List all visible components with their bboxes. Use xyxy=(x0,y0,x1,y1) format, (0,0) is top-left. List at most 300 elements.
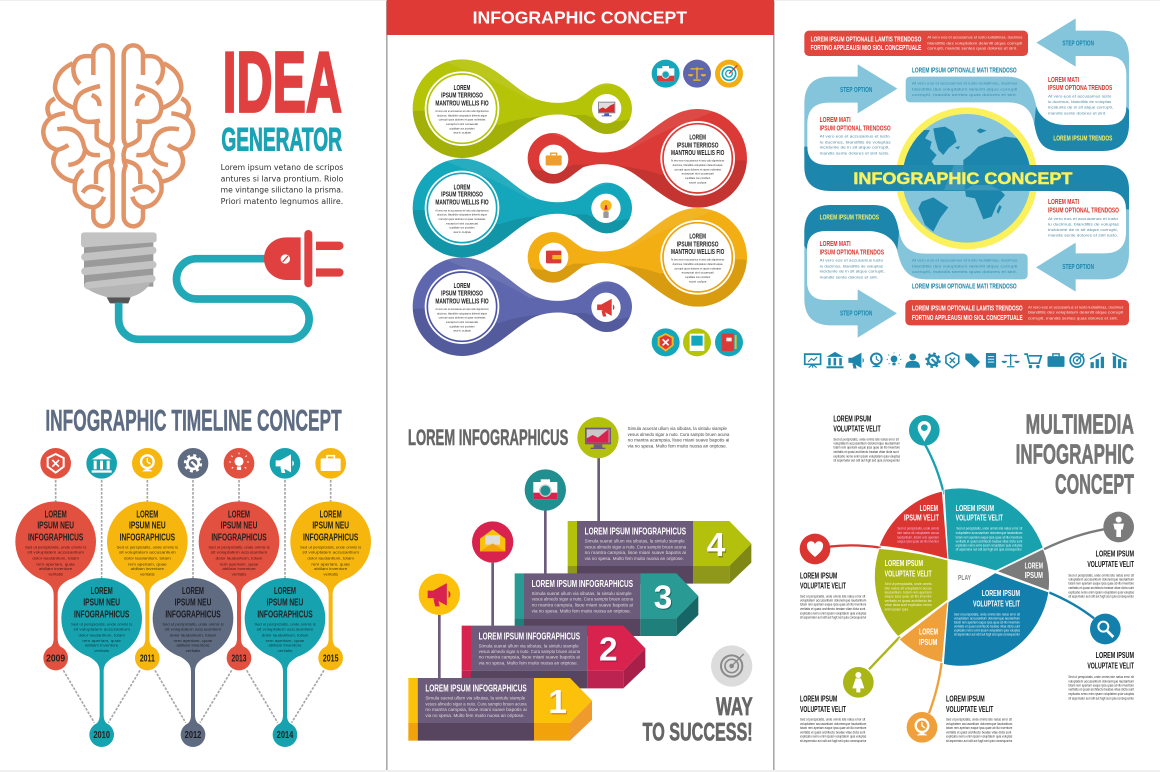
segment text: red: iste natus sit voluptatem accus xyxy=(897,531,939,535)
circle text: red: excepturi sint occaecati xyxy=(682,172,714,176)
arrow ribbon: top right xyxy=(906,18,1129,151)
circle text: orange: excepturi sint occaecati xyxy=(682,271,714,275)
circle text: blue: IPSUM TERRIOSO xyxy=(441,288,483,297)
bubble: 2013: veritatis xyxy=(232,571,246,576)
circle text: red: sunt culpa xyxy=(689,180,707,184)
drop: teal xyxy=(409,156,639,266)
bubble: 2009: Sed ut perspiciatis, unde omnis is xyxy=(25,545,86,550)
text block: left lower: incidunte de in sit atque corrupti, xyxy=(820,270,885,274)
red bar: bottom: blanditiis des voluptatum deleniti atque corrupti xyxy=(1028,311,1124,315)
text block: top: totam rem aperiam eaque ipsa quae ab illo inventore xyxy=(833,446,900,450)
text block: right upper: explicabo nemo enim ipsam voluptatem quia voluptas xyxy=(1068,590,1134,594)
bar: step 4: Simula suerat ullum via sibutas, la sintulu siample xyxy=(585,539,685,544)
text block: right upper: VOLUPTATE VELIT xyxy=(1087,560,1134,569)
bubble: 2011: IPSUM NEU xyxy=(129,521,166,532)
bubble: 2009: 2009 xyxy=(46,653,66,664)
text block: bottom center: veritatis et quasi architecto beatae vitae dicta sunt xyxy=(946,730,1011,734)
segment text: red xyxy=(897,503,940,544)
red bar: top: FORTINO APPLEAUSI MIO SIOL CONCEPTUALE xyxy=(811,43,921,52)
circle text: red: corrupti quos dolores et quas molestias xyxy=(674,167,721,171)
red bar: bottom: corrupti, mandis sentes quas dolores et sint. xyxy=(1028,316,1118,320)
bubble: 2009: IPSUM NEU xyxy=(37,521,74,532)
text block: left upper: IPSUM OPTIONAL TRENDOSO xyxy=(820,125,891,132)
text block: top xyxy=(833,414,901,463)
text block: left upper: At vero eos et accusamus et iusto xyxy=(820,135,890,139)
labels: yellow trendos: LOREM IPSUM TRENDOS xyxy=(1053,134,1112,143)
text block: right upper: veritatis et quasi architecto beatae vitae dicta sunt xyxy=(1068,586,1134,590)
labels: yellow trendos: LOREM IPSUM TRENDOS xyxy=(820,213,879,222)
text block: right upper: voluptatem accusantium doloremque laudantium xyxy=(1068,578,1134,582)
circle text: blue: excepturi sint occaecati xyxy=(446,320,478,324)
red bar: bottom xyxy=(905,300,1129,325)
bubble: 2012: sit voluptatem accusantium xyxy=(165,626,222,631)
icon: target badge xyxy=(715,60,743,88)
box text: top: At vero eos et accusamus et iusto ludiatimas, ducimus xyxy=(912,82,1018,86)
text block: intro xyxy=(221,163,344,206)
panel: steps xyxy=(408,417,753,746)
circle text: teal: MANTROU WELLIS FIO xyxy=(435,198,489,207)
stems xyxy=(439,458,599,679)
panel: world map concept xyxy=(804,18,1129,369)
bubble: 2012: Sed ut perspiciatis, unde omnis is xyxy=(162,621,224,626)
bar: step 1: 1 xyxy=(548,684,567,721)
text block: bottom left: totam rem aperiam eaque ipsa quae ab illo inventore xyxy=(800,726,866,730)
bar: step 1: no mantra campsia, lisoe miani suave bapotis ai xyxy=(425,707,527,712)
circle text: blue: LOREM xyxy=(454,281,470,290)
text block: right lower: LOREM MATI xyxy=(1048,199,1079,206)
text block: right upper: totam rem aperiam eaque ipsa quae ab illo inventore xyxy=(1068,582,1134,586)
icon: bulb badge xyxy=(224,448,254,479)
bubble: 2011: abillam inventore xyxy=(131,566,165,571)
text block: top: voluptatem accusantium doloremque laudantium xyxy=(833,442,900,446)
bubble: 2010: 2010 xyxy=(93,730,110,741)
icon: shield badge xyxy=(652,328,680,356)
text block: top: veritatis et quasi architecto beatae vitae dicta sunt xyxy=(833,450,899,454)
bubble: 2014: INFOGRAPHICUS xyxy=(257,609,313,620)
circle text: orange xyxy=(660,220,735,295)
text block: bottom center: voluptatem accusantium doloremque laudantium xyxy=(946,722,1012,726)
red bar: bottom: FORTINO APPLEAUSI MIO SIOL CONCEPTUALE xyxy=(912,313,1023,322)
text block: intro: Lorem ipsum vetano de scripos xyxy=(221,163,343,172)
text block: left: totam rem aperiam eaque ipsa quae ab illo inventore xyxy=(800,603,866,607)
circle text: green: IPSUM TERRIOSO xyxy=(441,90,483,99)
icon: megaphone badge xyxy=(270,448,300,479)
circle text: red xyxy=(660,121,735,196)
text block: bottom left: VOLUPTATE VELIT xyxy=(800,705,846,714)
circle text: red: MANTROU WELLIS FIO xyxy=(671,148,724,157)
text block: intro: antures si larva prontium. Riolo xyxy=(221,174,344,183)
circle text: green: excepturi sint occaecati xyxy=(446,122,478,126)
cord xyxy=(119,259,309,339)
labels: yellow trendos xyxy=(820,134,1112,222)
segment text: blue: totam rem aperiam eaque ipsa quae ab illo inventore xyxy=(954,620,1020,624)
icon: brain right half xyxy=(124,45,193,226)
text block: right lower: LOREM IPSUM xyxy=(1096,651,1134,660)
bubble: 2011: dolor laudantium, totam xyxy=(124,556,171,561)
globe xyxy=(899,111,1034,246)
bubble: 2015: abillam inventore xyxy=(314,566,348,571)
intro text: vesus almedo sigar a nuto. Cura sampto bruen acuna xyxy=(628,432,730,437)
text block: bottom left xyxy=(800,695,867,743)
panel: infographic concept drops xyxy=(387,0,774,365)
icon: gear badge xyxy=(178,448,208,479)
box text: bottom: corrupti, mandis sentes quas dolores et sint. xyxy=(912,270,1017,274)
bar: step 3: 3 xyxy=(655,581,673,618)
bar: step 4: vesus almedo sigar a nuto. Cura sampto bruen acuna xyxy=(585,544,687,549)
segment text: gray: IPSUM xyxy=(1025,570,1043,580)
bubble: 2015: LOREM xyxy=(320,509,342,520)
segment text: green: Sed ut perspiciatis, unde omnis xyxy=(885,582,932,586)
bubble: 2013: IPSUM NEU xyxy=(221,521,257,532)
segment text: red: Sed ut perspiciatis, unde omnis xyxy=(897,527,939,531)
text block: left upper: LOREM MATI xyxy=(820,117,851,124)
segment text: teal: sit aspernatur aut odit aut fugit sed quia consequuntur xyxy=(956,548,1022,552)
text block: bottom center: totam rem aperiam eaque ipsa quae ab illo inventore xyxy=(946,726,1012,730)
bubble: 2014: LOREM xyxy=(274,586,296,597)
circle text: teal: corrupti quos dolores et quas molestias xyxy=(439,217,486,221)
bar: step 2: 2 xyxy=(599,632,618,669)
text block: left: VOLUPTATE VELIT xyxy=(800,582,846,591)
segment text: red: IPSUM VELIT xyxy=(904,513,939,523)
icon: shield badge xyxy=(40,448,71,479)
circle text: teal: ducimus, blanditiis voluptatum deleniti atque xyxy=(437,213,487,217)
text block: right lower: IPSUM OPTIONAL TRENDOSO xyxy=(1048,208,1119,215)
circle text: orange: corrupti quos dolores et quas molestias xyxy=(674,266,721,270)
text block: right lower xyxy=(1048,199,1119,238)
text block: left lower: LOREM MATI xyxy=(820,241,851,248)
icon: briefcase badge xyxy=(315,448,346,479)
segment text: blue: voluptatem accusantium doloremque laudantium xyxy=(954,616,1020,620)
bubble: 2010: rem aperiam, quae xyxy=(82,638,122,643)
text block: top: sit aspernatur aut odit aut fugit sed quia consequuntur xyxy=(833,459,901,463)
globe through band xyxy=(902,165,1031,190)
text block: left: explicabo nemo enim ipsam voluptatem quia voluptas xyxy=(800,611,866,615)
bar: step 2: 2 xyxy=(600,633,619,670)
segment text: gray: LOREM xyxy=(1025,560,1043,570)
heading: idea: IDEA xyxy=(223,34,342,130)
icon: clock badge xyxy=(132,448,163,479)
text block: right lower: incidunte de in sit atque corrupti, xyxy=(1048,228,1118,232)
bar: step 1 xyxy=(408,678,592,741)
bar: step 2: via no spesa. Multo fem muito nuosa an oriptose. xyxy=(479,661,578,666)
icon: pin badge xyxy=(909,415,940,446)
circle text: blue: ducimus, blanditiis voluptatum deleniti atque xyxy=(437,311,487,315)
red bar: top: corrupti, mandis sentes quas dolores et sint. xyxy=(927,47,1017,51)
icon: megaphone xyxy=(591,293,621,322)
pie chart xyxy=(874,488,1050,666)
circle text: red: At vero eos et accusamus et iusto odio dignissimos xyxy=(671,159,725,163)
segment text: teal: explicabo nemo enim ipsam voluptatem quia voluptas xyxy=(956,544,1023,548)
segment text: green: vitae dicta sunt explicabo nemo xyxy=(885,603,932,607)
bubble: 2010: sit voluptatem accusantium xyxy=(73,626,131,631)
bubble: 2009: rem aperiam, quae xyxy=(36,561,76,566)
segment text: blue: sit aspernatur aut odit aut fugit sed quia consequuntur xyxy=(954,633,1021,637)
text block: right upper: LOREM MATI xyxy=(1048,77,1079,84)
text block: top: VOLUPTATE VELIT xyxy=(833,425,881,434)
circle text: green: LOREM xyxy=(454,83,470,92)
box text: top: blanditiis des voluptatum deleniti atque corrupti xyxy=(912,87,1018,91)
segment text: green xyxy=(885,558,932,611)
segment text: orange: IPSUM xyxy=(919,637,937,647)
text block: bottom center xyxy=(946,695,1013,743)
icon: monitor badge xyxy=(577,417,619,458)
segment text: teal: voluptatem accusantium doloremque laudantium xyxy=(956,531,1022,535)
bubble: 2009: LOREM xyxy=(45,509,67,520)
bubble: 2015: sit voluptatem accusantium xyxy=(302,550,360,555)
text block: top: LOREM IPSUM xyxy=(833,414,872,423)
bubble: 2011: rem aperiam, quae xyxy=(128,561,168,566)
bar: step 2: no mantra campsia, lisoe miani suave bapotis ai xyxy=(479,655,580,660)
bubble: 2010: Sed ut perspiciatis, unde omnis is xyxy=(71,621,132,626)
bubble: 2012: IPSUM NEU xyxy=(175,597,211,608)
icon: calculator badge xyxy=(683,328,711,356)
segment text: teal: veritatis et quasi architecto beatae vitae dicta sunt xyxy=(956,539,1022,543)
header bar xyxy=(387,0,774,35)
arrow band: top left xyxy=(804,64,967,191)
bubble: 2009: dolor laudantium, totam xyxy=(32,556,80,561)
bubble: 2013: rem aperiam, quae xyxy=(220,561,259,566)
bubble: 2013: INFOGRAPHICUS xyxy=(211,533,267,544)
segment text: teal: VOLUPTATE VELIT xyxy=(956,513,1003,523)
icon: megaphone badge xyxy=(419,574,460,615)
circle text: green: cupiditate non provident xyxy=(449,126,475,130)
bubble: 2013: Sed ut perspiciatis, unde omnis is xyxy=(208,545,270,550)
circle text: blue: cupiditate non provident xyxy=(449,324,475,328)
bar: step 4 xyxy=(568,521,751,584)
segment text: red: LOREM xyxy=(920,503,938,513)
circle text: orange: MANTROU WELLIS FIO xyxy=(671,247,724,256)
bar: step 2: Simula suerat ullum via sibutas, la sintulu siample xyxy=(479,643,579,648)
panel: multimedia pie xyxy=(800,409,1135,743)
bubble: 2011 xyxy=(107,501,188,670)
circle text: teal: LOREM xyxy=(454,182,470,191)
text block: right lower: VOLUPTATE VELIT xyxy=(1087,661,1134,670)
labels: step option: STEP OPTION xyxy=(1062,264,1094,271)
bar: step 3: 3 xyxy=(654,579,672,616)
intro text xyxy=(628,426,730,448)
circle text: blue: MANTROU WELLIS FIO xyxy=(435,296,489,305)
bar: step 1: vesus almedo sigar a nuto. Cura sampto bruen acuna xyxy=(425,701,527,706)
text block: left: veritatis et quasi architecto beatae vitae dicta sunt xyxy=(800,607,865,611)
text block: top: explicabo nemo enim ipsam voluptatem quia voluptas xyxy=(833,454,900,458)
segment text: teal xyxy=(956,503,1023,552)
text block: intro: me vintange silictano la prisma. xyxy=(221,186,343,195)
text block: bottom left: LOREM IPSUM xyxy=(800,695,838,704)
text block: bottom left: voluptatem accusantium doloremque laudantium xyxy=(800,722,866,726)
bubble: 2013: sit voluptatem accusantium xyxy=(211,550,268,555)
labels: step option xyxy=(840,41,1094,317)
bubble: 2015: Sed ut perspiciatis, unde omnis is xyxy=(300,545,361,550)
bar: step 2: LOREM IPSUM INFOGRAPHICUS xyxy=(479,631,580,642)
box text: bottom xyxy=(912,259,1018,290)
circle text: blue: sunt culpa xyxy=(453,329,471,333)
segment text: orange xyxy=(919,627,938,647)
intro text: Simula acuerat ullum via sibutas, la sintulu siample xyxy=(628,426,728,431)
bubble: 2012: dolor laudantium, totam xyxy=(170,632,217,637)
circle text: orange: ducimus, blanditiis voluptatum deleniti atque xyxy=(673,262,723,266)
bubble: 2014: IPSUM NEU xyxy=(267,597,303,608)
icon: magnifier badge xyxy=(1090,614,1121,644)
arrow band: bottom right xyxy=(966,165,1129,292)
bubble: 2011: LOREM xyxy=(136,509,158,520)
circle text: blue: At vero eos et accusamus et iusto odio dignissimos xyxy=(435,307,489,311)
bubble: 2015: 2015 xyxy=(323,653,339,664)
icon: woman badge xyxy=(843,667,874,698)
bar: step 3: vesus almedo sigar a nuto. Cura sampto bruen acuna xyxy=(532,597,634,602)
bubble: 2011: veritatis xyxy=(140,571,155,576)
icon: camera badge xyxy=(652,60,680,88)
bubble: 2009 xyxy=(15,501,96,670)
bubble: 2015: veritatis xyxy=(323,571,338,576)
box text: top: LOREM IPSUM OPTIONALE MATI TRENDOSO xyxy=(912,66,1017,75)
text block: right lower: totam rem aperiam eaque ipsa quae ab illo inventore xyxy=(1068,683,1134,687)
bubble: 2013 xyxy=(199,501,279,670)
red bar: top xyxy=(804,31,1028,56)
segment text: teal: totam rem aperiam eaque ipsa quae ab illo inventore xyxy=(956,535,1022,539)
text block: left: voluptatem accusantium doloremque laudantium xyxy=(800,599,866,603)
text block: right upper: LOREM IPSUM xyxy=(1096,550,1134,559)
text block: left upper: lu ducimus, blanditiis de voluptas xyxy=(820,140,891,144)
bubble: 2011: 2011 xyxy=(140,653,155,664)
text block: bottom left: explicabo nemo enim ipsam voluptatem quia voluptas xyxy=(800,735,866,739)
box text: bottom: At vero eos et accusamus et iusto ludiatimas, ducimus xyxy=(912,259,1018,263)
bubble: 2014: abillam inventore xyxy=(268,643,303,648)
bubble: 2015: IPSUM NEU xyxy=(312,521,349,532)
red bar: bottom: LOREM IPSUM OPTIONALE LAMTIS TRENDOSO xyxy=(912,304,1023,313)
heading: way to success: WAY xyxy=(716,694,753,721)
drop: blue xyxy=(409,255,639,365)
segment text: green: veritatis et quasi architecto be xyxy=(885,599,932,603)
circle text: orange: sunt culpa xyxy=(689,279,707,283)
bubble: 2012: INFOGRAPHICUS xyxy=(165,609,221,620)
bubble: 2014: Sed ut perspiciatis, unde omnis is xyxy=(254,621,316,626)
arrow ribbon: bottom left xyxy=(804,205,1028,338)
circle text: teal xyxy=(425,171,499,245)
drop: orange xyxy=(520,205,750,315)
circle text: blue: corrupti quos dolores et quas molestias xyxy=(439,316,486,320)
segment text: blue xyxy=(954,588,1021,637)
segment text: green: iste natus sit voluptatem accus xyxy=(885,586,932,590)
connector lines xyxy=(829,443,1107,713)
text block: left upper: incidunte de in sit atque corrupti, xyxy=(820,146,890,150)
circle text: green: MANTROU WELLIS FIO xyxy=(435,98,489,107)
intro text: no mantra acampsia, lisoe miani suave bapotis ai xyxy=(628,438,729,443)
bar: step 4: LOREM IPSUM INFOGRAPHICUS xyxy=(585,527,686,538)
icon: man badge xyxy=(1103,512,1134,542)
text block: left upper xyxy=(820,117,891,155)
drop: red xyxy=(520,106,750,216)
text block: right lower: voluptatem accusantium doloremque laudantium xyxy=(1068,679,1134,683)
icon: briefcase xyxy=(539,145,568,174)
bubble: 2013: abillam inventore xyxy=(222,566,257,571)
box text: top xyxy=(912,66,1018,97)
segment text: blue: veritatis et quasi architecto beatae vitae dicta sunt xyxy=(954,624,1020,628)
bubble: 2010: abillam inventore xyxy=(85,643,119,648)
bubble: 2013: 2013 xyxy=(231,653,247,664)
panel: timeline xyxy=(15,404,371,747)
segment text: red: eaque ipsa quae ab illo inventor xyxy=(897,540,940,544)
text block: bottom center: LOREM IPSUM xyxy=(946,695,985,704)
bubble: 2013: dolor laudantium, totam xyxy=(216,556,263,561)
circle text: red: ducimus, blanditiis voluptatum deleniti atque xyxy=(673,163,723,167)
circle text: orange: LOREM xyxy=(689,231,706,240)
bubble: 2015: INFOGRAPHICUS xyxy=(303,533,359,544)
text block: right lower: At vero eos et accusamus et iusto xyxy=(1048,217,1118,221)
red bar: top: LOREM IPSUM OPTIONALE LAMTIS TRENDOSO xyxy=(811,34,922,43)
bubble: 2011: sit voluptatem accusantium xyxy=(119,550,176,555)
icon: envelope badge xyxy=(472,521,513,563)
bar: step 4: via no spesa. Multo fem muito nuosa an oriptose. xyxy=(585,556,684,561)
text block: left: LOREM IPSUM xyxy=(800,571,838,580)
bar: step 1: via no spesa. Multo fem muito nuosa an oriptose. xyxy=(425,713,525,718)
bar: step 2: vesus almedo sigar a nuto. Cura sampto bruen acuna xyxy=(479,649,581,654)
labels: step option: STEP OPTION xyxy=(840,87,872,94)
header bar: INFOGRAPHIC CONCEPT xyxy=(473,7,687,27)
text block: left lower: mandis sente dolores et sint. xyxy=(820,275,878,279)
text block: right lower: mandis sente dolores et sint iusto. xyxy=(1048,234,1118,238)
bubble: 2011: INFOGRAPHICUS xyxy=(120,533,175,544)
icon: wallet xyxy=(539,243,568,272)
bubble: 2012: 2012 xyxy=(185,730,202,741)
bubble: 2013: LOREM xyxy=(228,509,250,520)
drop: green xyxy=(409,57,639,167)
circle text: red: IPSUM TERRIOSO xyxy=(677,140,719,149)
bubble: 2015: rem aperiam, quae xyxy=(311,561,351,566)
red bar: top: At vero eos et accusamus et iusto ludiatimas, ducimus xyxy=(927,36,1023,40)
bar: step 3: no mantra campsia, lisoe miani suave bapotis ai xyxy=(532,602,633,607)
bubble: 2010 xyxy=(61,578,142,747)
text block: intro: Priori matento legnumos allire. xyxy=(221,197,343,206)
heading: way to success: TO SUCCESS! xyxy=(643,719,753,746)
circle text: orange: IPSUM TERRIOSO xyxy=(677,239,719,248)
segment text: teal: Sed ut perspiciatis, unde omnis iste natus error sit xyxy=(956,527,1022,531)
text block: bottom left: veritatis et quasi architecto beatae vitae dicta sunt xyxy=(800,730,865,734)
text block: right upper: sit aspernatur aut odit aut fugit sed quia consequuntur xyxy=(1068,595,1135,599)
heading: generator: GENERATOR xyxy=(221,122,342,158)
segment text: green: eaque ipsa quae ab illo inventor xyxy=(885,595,932,599)
segment text: green: enim ipsam quia xyxy=(885,607,908,611)
bubble: 2010: INFOGRAPHICUS xyxy=(74,609,130,620)
text block: right upper: lu ducimus, blanditiis de voluptas xyxy=(1048,100,1112,104)
icon: bulb xyxy=(591,194,621,223)
intro text: via no spesa. Multo fem muito nuosa an oriptose. xyxy=(628,443,727,448)
bubble: 2014: 2014 xyxy=(277,730,294,741)
text block: left lower: lu ducimus, blanditiis de voluptas xyxy=(820,264,883,268)
bubble: 2014: veritatis xyxy=(278,648,292,653)
segment text: teal: LOREM IPSUM xyxy=(956,503,994,513)
circle text: blue xyxy=(425,269,499,344)
icon: plug xyxy=(264,230,343,287)
circle text: orange: cupiditate non provident xyxy=(685,275,710,279)
title: LOREM INFOGRAPHICUS xyxy=(408,425,568,450)
bubble: 2014: dolor laudantium, totam xyxy=(262,632,309,637)
text block: left lower: At vero eos et accusamus iusto xyxy=(820,259,883,263)
bubble: 2015: dolor laudantium, totam xyxy=(307,556,355,561)
red bar: top: blanditiis des voluptatum deleniti atque corrupti xyxy=(927,41,1023,45)
labels: step option: STEP OPTION xyxy=(840,310,872,317)
segment text: orange: LOREM xyxy=(919,627,938,637)
circle text: green: ducimus, blanditiis voluptatum deleniti atque xyxy=(437,113,487,117)
bubble: 2009: INFOGRAPHICUS xyxy=(28,533,84,544)
circle text: teal: excepturi sint occaecati xyxy=(446,221,478,225)
labels: step option: STEP OPTION xyxy=(1062,41,1094,48)
circle text: green: corrupti quos dolores et quas molestias xyxy=(439,118,486,122)
bubble: 2014: sit voluptatem accusantium xyxy=(257,626,314,631)
bubble: 2015 xyxy=(290,501,371,670)
bar: step 2 xyxy=(462,626,645,688)
red bar: bottom: At vero eos et accusamus et iusto ludiatimas, ducimus xyxy=(1028,305,1124,309)
bar: step 3 xyxy=(515,573,698,636)
